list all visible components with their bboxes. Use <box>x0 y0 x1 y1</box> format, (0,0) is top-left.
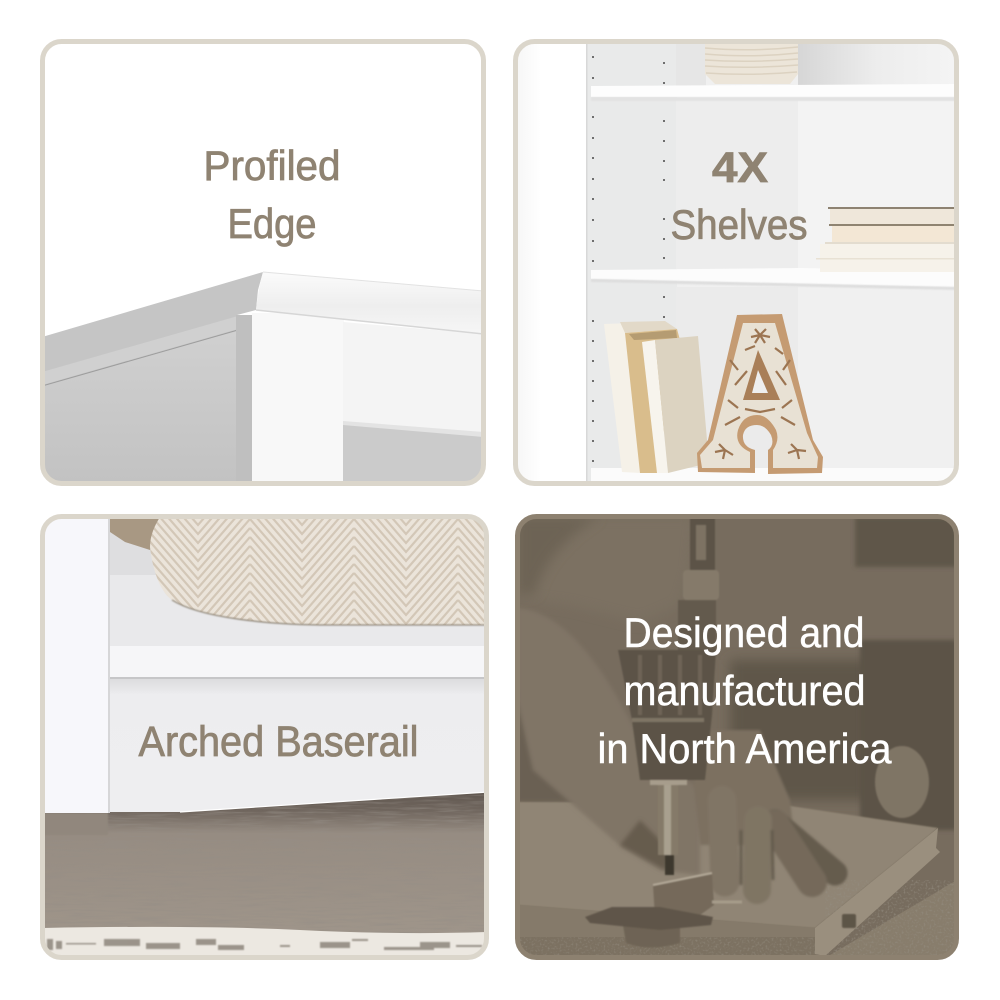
board <box>517 802 938 928</box>
throw blanket <box>110 517 488 625</box>
photo: cabinet corner with profiled edge <box>42 272 484 484</box>
heading: Profiled Edge: Edge <box>228 200 316 247</box>
heading: Profiled Edge: Profiled <box>204 142 340 189</box>
panel: profiled edge <box>42 42 484 484</box>
drill <box>618 517 719 875</box>
heading: 4X Shelves <box>670 144 808 248</box>
rug <box>42 927 488 958</box>
carpet <box>830 882 954 955</box>
heading: Designed and manufactured in North America: manufactured <box>624 667 866 714</box>
lower left shade <box>520 720 565 801</box>
panel: arched baserail <box>42 516 488 958</box>
paper roll decor <box>705 42 798 84</box>
heading: Profiled Edge <box>204 142 340 247</box>
photo: bed base with floor and rug <box>42 517 488 958</box>
heading: Arched Baserail: Arched Baserail <box>138 718 418 766</box>
photo: hands assembling with a drill, sepia <box>517 516 960 958</box>
floor <box>42 790 488 935</box>
decorative letter A <box>697 314 823 474</box>
stacked books <box>816 207 956 272</box>
panel: 4X shelves <box>516 42 957 484</box>
bed rail <box>108 646 488 677</box>
forearm <box>517 608 700 875</box>
upright books <box>604 321 709 473</box>
heading: 4X Shelves: Shelves <box>670 201 808 248</box>
shelf pin holes <box>592 56 665 462</box>
cabinet hinge <box>585 873 856 948</box>
sleeve <box>517 516 695 622</box>
photo: open shelves <box>516 42 957 484</box>
heading: 4X Shelves: 4X <box>712 144 768 192</box>
background shadows <box>855 517 957 567</box>
panel: designed and manufactured <box>517 516 960 958</box>
heading: Designed and manufactured in North America <box>598 609 892 772</box>
heading: Designed and manufactured in North America: Designed and <box>624 609 864 656</box>
hand <box>688 730 835 890</box>
shelves <box>591 84 957 97</box>
heading: Designed and manufactured in North America: in North America <box>598 725 892 772</box>
